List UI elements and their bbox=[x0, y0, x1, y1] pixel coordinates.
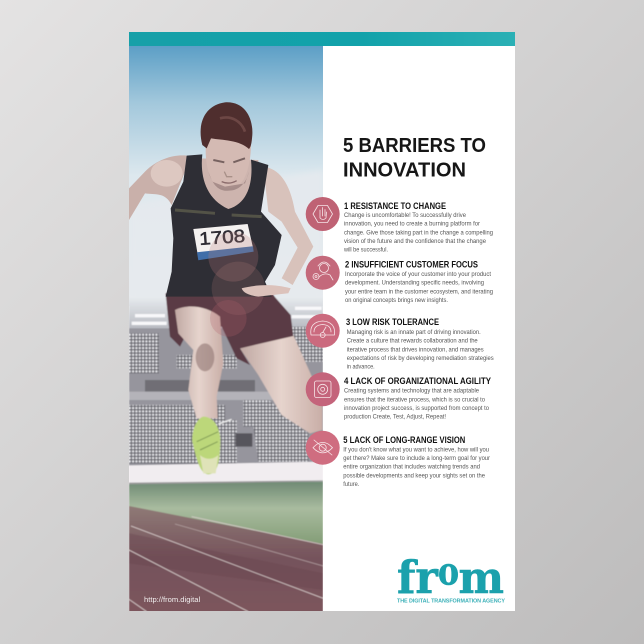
body text: your entire team in the customer ecosystem, and iterating bbox=[345, 288, 494, 295]
icon: hand in hexagon bbox=[306, 197, 340, 231]
body text: iterative process that drives innovation, and manages bbox=[347, 346, 484, 353]
logo: from: m bbox=[458, 553, 504, 604]
barrier 1 bbox=[306, 197, 494, 254]
body text: innovation project success, is supported from concept to bbox=[344, 405, 490, 412]
body text: vision of the future and the confidence that the change bbox=[344, 238, 487, 245]
body text: innovation, you need to create a burning platform for bbox=[344, 221, 480, 228]
body text: in advance. bbox=[347, 364, 375, 371]
body text: possible developments and keep your sights set on the bbox=[343, 472, 486, 479]
body text bbox=[347, 329, 494, 371]
heading: 3 LOW RISK TOLERANCE bbox=[346, 317, 439, 327]
body text: Creating systems and technology that are adaptable bbox=[344, 388, 480, 395]
race bib: 1708 bbox=[199, 226, 246, 249]
logo tagline: THE DIGITAL TRANSFORMATION AGENCY bbox=[397, 599, 505, 605]
top teal band bbox=[129, 32, 515, 46]
lane lines bbox=[129, 517, 323, 612]
title: INNOVATION bbox=[343, 160, 466, 182]
icon: customer with gear bbox=[306, 256, 340, 290]
hair bbox=[201, 102, 252, 149]
barrier 3 bbox=[306, 314, 494, 371]
icon: iterative gear loop bbox=[306, 372, 340, 406]
body text bbox=[343, 446, 490, 488]
lower scene bbox=[129, 293, 323, 613]
hurdle bbox=[129, 462, 323, 483]
poster sheet bbox=[129, 32, 515, 611]
url caption: http://from.digital bbox=[144, 595, 200, 604]
sky bbox=[129, 46, 323, 306]
athlete upper body bbox=[129, 102, 313, 337]
shoe bbox=[192, 417, 220, 474]
stadium roof structure bbox=[129, 170, 323, 300]
logo: from: fr bbox=[397, 551, 439, 604]
body text: Incorporate the voice of your customer into your product bbox=[345, 271, 491, 278]
body text: get there? Make sure to include a long-term goal for your bbox=[343, 455, 490, 462]
heading: 5 LACK OF LONG-RANGE VISION bbox=[343, 435, 465, 445]
barrier 5 bbox=[306, 431, 490, 488]
body text: entire organization that includes watching trends and bbox=[343, 464, 481, 471]
body text: production Create, Test, Adjust, Repeat! bbox=[344, 414, 446, 421]
logo: from: o bbox=[438, 548, 459, 594]
photo: hurdler athlete in stadium bbox=[129, 46, 323, 613]
hand bbox=[242, 285, 291, 297]
race bib bbox=[193, 224, 254, 260]
logo: from bbox=[397, 548, 504, 604]
icon: crossed-out eye bbox=[306, 431, 340, 465]
icon: speedometer bbox=[306, 314, 340, 348]
body text: ensures that the iterative process, which is so crucial to bbox=[344, 396, 486, 403]
body text bbox=[345, 271, 494, 304]
heading: 2 INSUFFICIENT CUSTOMER FOCUS bbox=[345, 260, 478, 270]
body text: development. Understanding specific needs, involving bbox=[345, 280, 485, 287]
right leg bbox=[240, 335, 322, 433]
body text bbox=[343, 212, 494, 254]
body text: expectations of risk by developing remediation strategies bbox=[347, 355, 494, 362]
grass bbox=[129, 482, 323, 548]
white text panel bbox=[323, 46, 515, 611]
body text: change. Give those taking part in the change a compelling bbox=[344, 229, 494, 236]
body text: future. bbox=[343, 481, 360, 488]
head bbox=[206, 138, 251, 160]
body text: Create a culture that rewards collaboration and the bbox=[347, 338, 478, 345]
stands bbox=[129, 328, 323, 466]
body text: Change is uncomfortable! To successfully drive bbox=[344, 212, 467, 219]
neck and chest bbox=[202, 158, 258, 209]
left leg bbox=[175, 307, 223, 418]
heading: 1 RESISTANCE TO CHANGE bbox=[344, 201, 446, 211]
right arm bbox=[263, 167, 313, 285]
singlet bbox=[166, 154, 282, 297]
left arm bbox=[129, 155, 187, 220]
heading: 4 LACK OF ORGANIZATIONAL AGILITY bbox=[344, 376, 491, 386]
track bbox=[129, 506, 323, 613]
shorts bbox=[166, 293, 293, 365]
body text: will be successful. bbox=[343, 247, 388, 254]
body text: Managing risk is an innate part of driving innovation. bbox=[347, 329, 481, 336]
body text: If you don't know what you want to achieve, how will you bbox=[343, 446, 490, 453]
body text: on original concepts brings new insights. bbox=[345, 297, 448, 304]
body text bbox=[344, 388, 490, 421]
barrier 2 bbox=[306, 256, 494, 304]
barrier 4 bbox=[306, 372, 491, 421]
lens flares bbox=[208, 232, 258, 282]
title: 5 BARRIERS TO bbox=[343, 135, 486, 157]
